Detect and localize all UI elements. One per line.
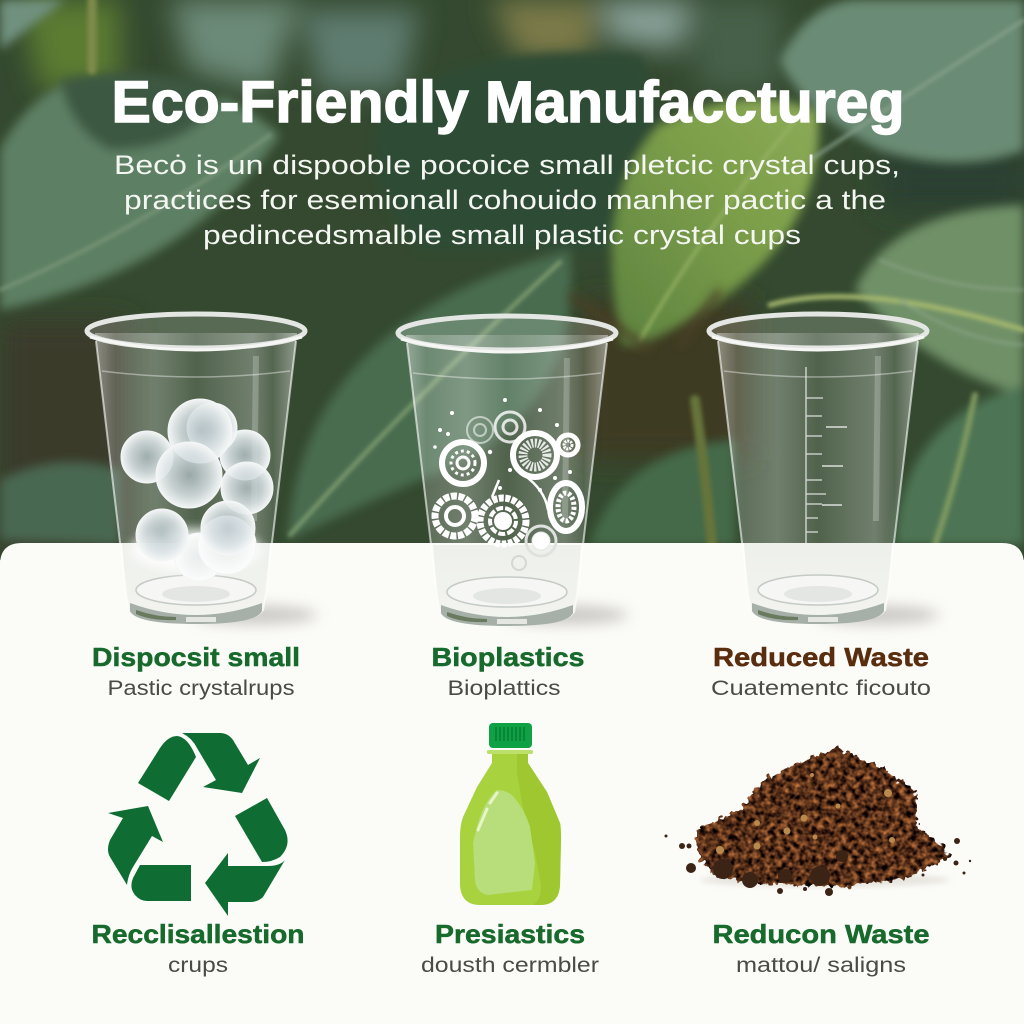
intro text: Becȯ is un dispoobIe pocoice small pletcic crystal cups, [114,150,900,180]
label: Presiastics: Presiastics [435,919,585,949]
icon: compost soil pile [664,748,971,896]
label: Recclisallestion: crups [168,954,228,977]
cup 3: measuring scale [709,314,939,624]
label: Reduced Waste: Reduced Waste [713,642,929,672]
label: Reducon Waste: Reducon Waste [712,919,930,949]
label: Dispocsit small: Pastic crystalrups [108,677,294,700]
intro text [114,150,900,250]
label: Reduced Waste: Cuatementc ficouto [711,677,931,700]
label: Reducon Waste: mattou/ saligns [736,954,906,977]
label: Bioplastics: Bioplattics [448,677,560,700]
label: Presiastics [421,919,599,977]
background: blurred leaves [0,0,1024,560]
cup 1: crystal spheres [87,314,317,624]
intro text: pedincedsmalble small plastic crystal cups [203,220,801,250]
cup 2: white circle patterns [398,316,628,626]
label: Recclisallestion: Recclisallestion [92,919,304,949]
icon: green bottle [460,723,561,905]
label: Bioplastics: Bioplastics [432,642,584,672]
label: Presiastics: dousth cermbler [421,954,599,977]
label: Recclisallestion [92,919,304,977]
icon: recycling arrows [108,733,288,916]
label: Dispocsit small: Dispocsit small [92,642,300,672]
label: Reducon Waste [712,919,930,977]
white panel [0,543,1024,1024]
label: Dispocsit small [92,642,300,700]
title: Eco-Friendly Manufacctureg [112,70,904,135]
intro text: practices for esemionall cohouido manher pactic a the [124,185,886,215]
label: Reduced Waste [711,642,931,700]
label: Bioplastics [432,642,584,700]
